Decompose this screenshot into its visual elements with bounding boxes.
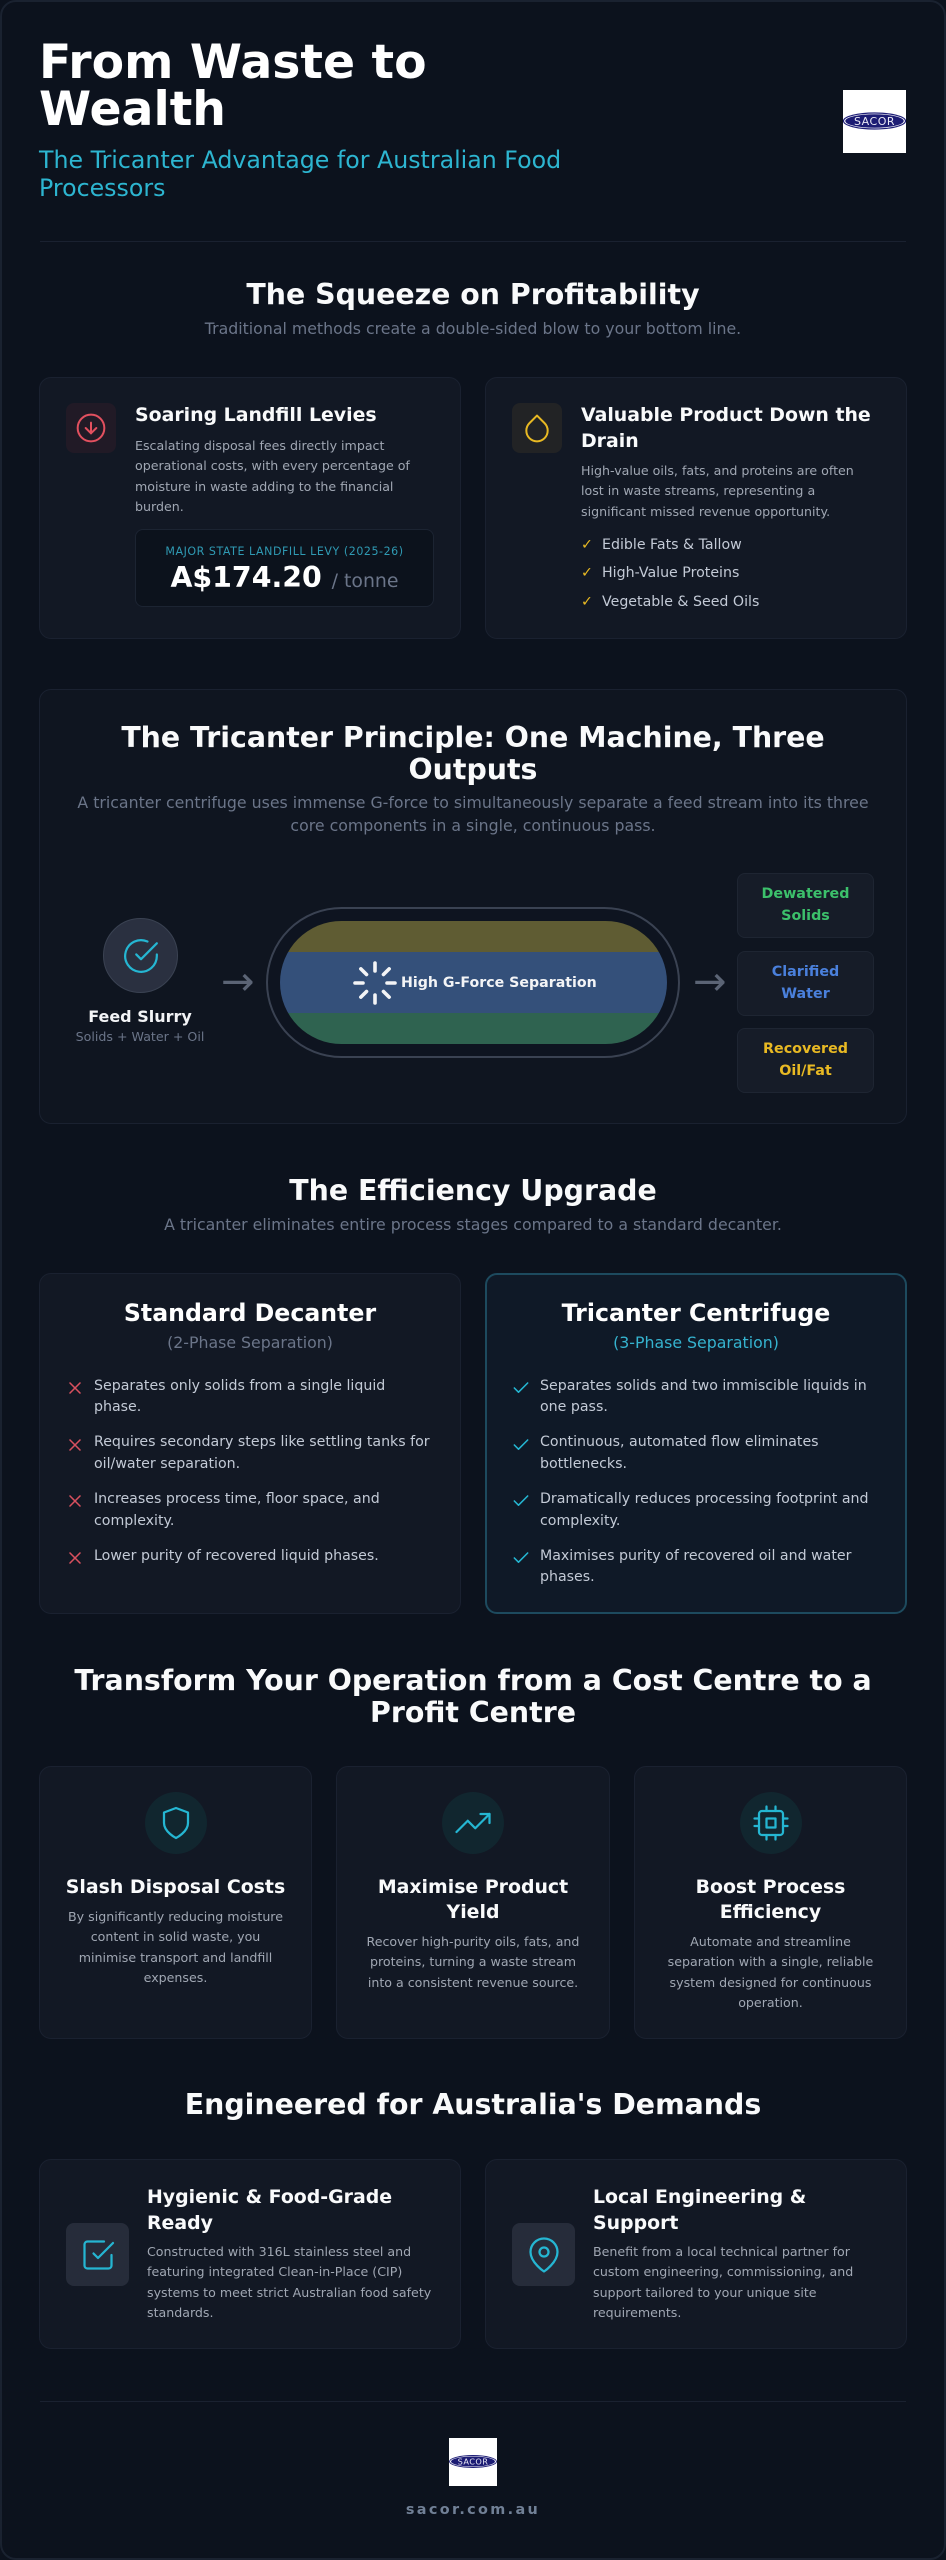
text: yield: Recover high-purity oils, fats, and xyxy=(367,1934,579,1949)
item: continuous flow xyxy=(514,1434,819,1472)
heading: efficiency: The Efficiency Upgrade xyxy=(289,1174,657,1207)
text: drain: significant missed revenue opportunity. xyxy=(581,504,830,519)
diagram: separation flow xyxy=(76,873,874,1093)
panel: hygienic xyxy=(39,2159,461,2349)
item: oils: ✓ xyxy=(581,594,593,610)
panel: tricanter principle xyxy=(39,689,907,1124)
item: one pass xyxy=(514,1378,867,1415)
panel: tricanter centrifuge xyxy=(485,1273,907,1614)
text: yield: into a consistent revenue source. xyxy=(368,1975,578,1990)
panel background xyxy=(39,689,907,1124)
text: efficiency card: Automate and streamline xyxy=(690,1934,851,1949)
heading: local: Support xyxy=(593,2212,678,2234)
item: footprint: Dramatically reduces processing footprint and xyxy=(540,1491,868,1507)
separation bands xyxy=(280,921,667,1044)
icon: map pin xyxy=(512,2223,575,2286)
heading: disposal: Slash Disposal Costs xyxy=(66,1876,285,1898)
panel: product down the drain xyxy=(485,377,907,639)
text: local: Benefit from a local technical partner for xyxy=(593,2244,850,2259)
output: solids xyxy=(737,873,874,938)
panel: local engineering xyxy=(485,2159,907,2349)
icon: feed slurry xyxy=(103,918,178,993)
heading: drain xyxy=(581,404,871,452)
text: local: requirements. xyxy=(593,2305,681,2320)
label: feed contents: Solids + Water + Oil xyxy=(76,1029,204,1044)
header xyxy=(38,35,906,202)
panel: standard decanter xyxy=(39,1273,461,1614)
footer logo xyxy=(449,2438,497,2486)
heading: drain: Valuable Product Down the xyxy=(581,404,871,426)
text: hygienic: systems to meet strict Australian food safety xyxy=(147,2285,431,2300)
title xyxy=(39,35,427,137)
heading: tricanter: Tricanter Centrifuge xyxy=(562,1299,830,1327)
item: one pass: Separates solids and two immiscible liquids in xyxy=(540,1378,867,1394)
text: yield: proteins, turning a waste stream xyxy=(370,1954,576,1969)
text: efficiency card xyxy=(668,1934,873,2010)
heading: principle: Outputs xyxy=(409,752,537,786)
text: drain: lost in waste streams, representing a xyxy=(581,483,815,498)
heading: efficiency card: Boost Process xyxy=(696,1876,845,1898)
item: purity: phases. xyxy=(540,1569,595,1585)
levy value: A$174.20 / tonne xyxy=(170,561,399,594)
subheading: squeeze: Traditional methods create a double-sided blow to your bottom line. xyxy=(205,319,741,338)
text: levies xyxy=(135,438,410,514)
item: continuous flow: Continuous, automated flow eliminates xyxy=(540,1434,819,1450)
heading: hygienic: Hygienic & Food-Grade xyxy=(147,2186,392,2208)
icon: loader xyxy=(353,961,397,1005)
list: decanter drawbacks xyxy=(69,1378,430,1564)
heading: squeeze: The Squeeze on Profitability xyxy=(246,278,700,310)
item: fats: Edible Fats & Tallow xyxy=(602,536,742,552)
text: hygienic xyxy=(147,2244,431,2320)
panel: maximise product yield xyxy=(336,1766,610,2039)
text: efficiency card: separation with a single, reliable xyxy=(668,1954,873,1969)
logo xyxy=(843,90,906,153)
text: efficiency card: system designed for continuous xyxy=(670,1975,871,1990)
item: secondary steps: oil/water separation. xyxy=(94,1456,240,1472)
panel: boost process efficiency xyxy=(634,1766,907,2039)
product list xyxy=(581,536,759,610)
heading: drain: Drain xyxy=(581,430,639,452)
text: levies: Escalating disposal fees directly impact xyxy=(135,438,384,453)
output: water xyxy=(737,951,874,1016)
heading: local xyxy=(593,2186,806,2234)
heading: transform: Transform Your Operation from a Cost Centre to a xyxy=(74,1664,872,1697)
text: yield xyxy=(367,1934,579,1990)
item: secondary steps xyxy=(69,1434,430,1472)
heading: transform xyxy=(74,1664,872,1729)
text: levies: moisture in waste adding to the financial xyxy=(135,479,393,494)
item: lower purity: Lower purity of recovered liquid phases. xyxy=(94,1548,379,1564)
heading: principle xyxy=(121,720,825,786)
text: disposal: By significantly reducing moisture xyxy=(68,1909,283,1924)
footer logo: SACOR xyxy=(458,2456,488,2466)
output: oil: Oil/Fat xyxy=(779,1063,832,1079)
output: solids: Dewatered xyxy=(762,886,849,902)
heading: efficiency card: Efficiency xyxy=(720,1901,821,1923)
heading: engineered: Engineered for Australia's Demands xyxy=(185,2088,761,2121)
text: local: custom engineering, commissioning, and xyxy=(593,2264,853,2279)
item: purity: Maximises purity of recovered oil and water xyxy=(540,1548,851,1564)
output: solids: Solids xyxy=(781,908,830,924)
item: fats: ✓ xyxy=(581,536,593,552)
output: oil xyxy=(737,1028,874,1093)
text: principle: core components in a single, continuous pass. xyxy=(290,816,656,835)
text: levies: burden. xyxy=(135,499,184,514)
subtitle xyxy=(38,146,561,202)
item: process time: complexity. xyxy=(94,1513,174,1529)
text: local: support tailored to your unique site xyxy=(593,2285,817,2300)
label: feed slurry: Feed Slurry xyxy=(88,1007,192,1026)
icon: check square xyxy=(66,2223,129,2286)
item: secondary steps: Requires secondary steps like settling tanks for xyxy=(94,1434,430,1450)
output: water: Water xyxy=(781,986,830,1002)
subheading: efficiency: A tricanter eliminates entire process stages compared to a standard decanter. xyxy=(164,1215,782,1234)
band: oil xyxy=(280,921,667,952)
icon: shield xyxy=(145,1792,207,1854)
item: proteins: ✓ xyxy=(581,565,593,581)
item: oils: Vegetable & Seed Oils xyxy=(602,594,759,610)
item: proteins: High-Value Proteins xyxy=(602,565,739,581)
text: hygienic: standards. xyxy=(147,2305,214,2320)
heading: transform: Profit Centre xyxy=(370,1696,576,1729)
icon: arrow down circle xyxy=(66,403,116,453)
text: local xyxy=(593,2244,853,2320)
heading: efficiency card xyxy=(696,1876,845,1923)
item: one pass: one pass. xyxy=(540,1399,608,1415)
subtitle: Processors xyxy=(39,174,165,202)
title: Wealth xyxy=(39,82,226,137)
text: drain xyxy=(581,463,854,519)
subtitle: The Tricanter Advantage for Australian Food xyxy=(39,146,561,174)
callout: levy figure xyxy=(135,529,434,607)
subheading: tricanter: (3-Phase Separation) xyxy=(613,1333,779,1352)
text: disposal xyxy=(68,1909,283,1985)
item: purity xyxy=(514,1548,852,1585)
item: process time xyxy=(69,1491,380,1529)
footer url: sacor.com.au xyxy=(406,2502,540,2518)
panel: landfill levies xyxy=(39,377,461,639)
heading: hygienic xyxy=(147,2186,392,2234)
heading: decanter: Standard Decanter xyxy=(124,1299,376,1327)
band: solids xyxy=(280,1013,667,1044)
heading: yield: Maximise Product xyxy=(378,1876,568,1898)
icon: droplet xyxy=(512,403,562,453)
list: tricanter benefits xyxy=(514,1378,868,1585)
item: solids only: Separates only solids from a single liquid xyxy=(94,1378,385,1394)
arrow: into centrifuge: → xyxy=(221,959,255,1005)
item: footprint xyxy=(514,1491,868,1529)
levy label: MAJOR STATE LANDFILL LEVY (2025-26) xyxy=(165,544,404,558)
text: disposal: expenses. xyxy=(144,1970,207,1985)
band: water xyxy=(280,952,667,1013)
text: drain: High-value oils, fats, and proteins are often xyxy=(581,463,854,478)
item: solids only xyxy=(69,1378,385,1415)
label: g-force: High G-Force Separation xyxy=(401,975,597,991)
item: process time: Increases process time, floor space, and xyxy=(94,1491,380,1507)
text: disposal: minimise transport and landfill xyxy=(79,1950,272,1965)
text: hygienic: featuring integrated Clean-in-Place (CIP) xyxy=(147,2264,402,2279)
text: principle xyxy=(77,793,869,835)
text: hygienic: Constructed with 316L stainless steel and xyxy=(147,2244,411,2259)
item: footprint: complexity. xyxy=(540,1513,620,1529)
text: levies: operational costs, with every percentage of xyxy=(135,458,410,473)
footer xyxy=(406,2438,540,2518)
panel: slash disposal costs xyxy=(39,1766,312,2039)
text: principle: A tricanter centrifuge uses immense G-force to simultaneously separate a feed stream into its three xyxy=(77,793,869,812)
output: oil: Recovered xyxy=(763,1041,848,1057)
text: efficiency card: operation. xyxy=(738,1995,803,2010)
icon: cpu xyxy=(740,1792,802,1854)
heading: yield: Yield xyxy=(447,1901,499,1923)
title: From Waste to xyxy=(39,35,427,90)
logo: SACOR xyxy=(854,115,895,128)
heading: yield xyxy=(378,1876,568,1923)
subheading: decanter: (2-Phase Separation) xyxy=(167,1333,333,1352)
heading: levies: Soaring Landfill Levies xyxy=(135,404,377,426)
heading: local: Local Engineering & xyxy=(593,2186,806,2208)
item: continuous flow: bottlenecks. xyxy=(540,1456,627,1472)
item: solids only: phase. xyxy=(94,1399,141,1415)
centrifuge xyxy=(266,907,680,1058)
output: water: Clarified xyxy=(772,964,839,980)
arrow: out of centrifuge: → xyxy=(693,959,727,1005)
heading: hygienic: Ready xyxy=(147,2212,213,2234)
heading: principle: The Tricanter Principle: One Machine, Three xyxy=(121,720,825,754)
text: disposal: content in solid waste, you xyxy=(91,1929,260,1944)
icon: trending up xyxy=(442,1792,504,1854)
